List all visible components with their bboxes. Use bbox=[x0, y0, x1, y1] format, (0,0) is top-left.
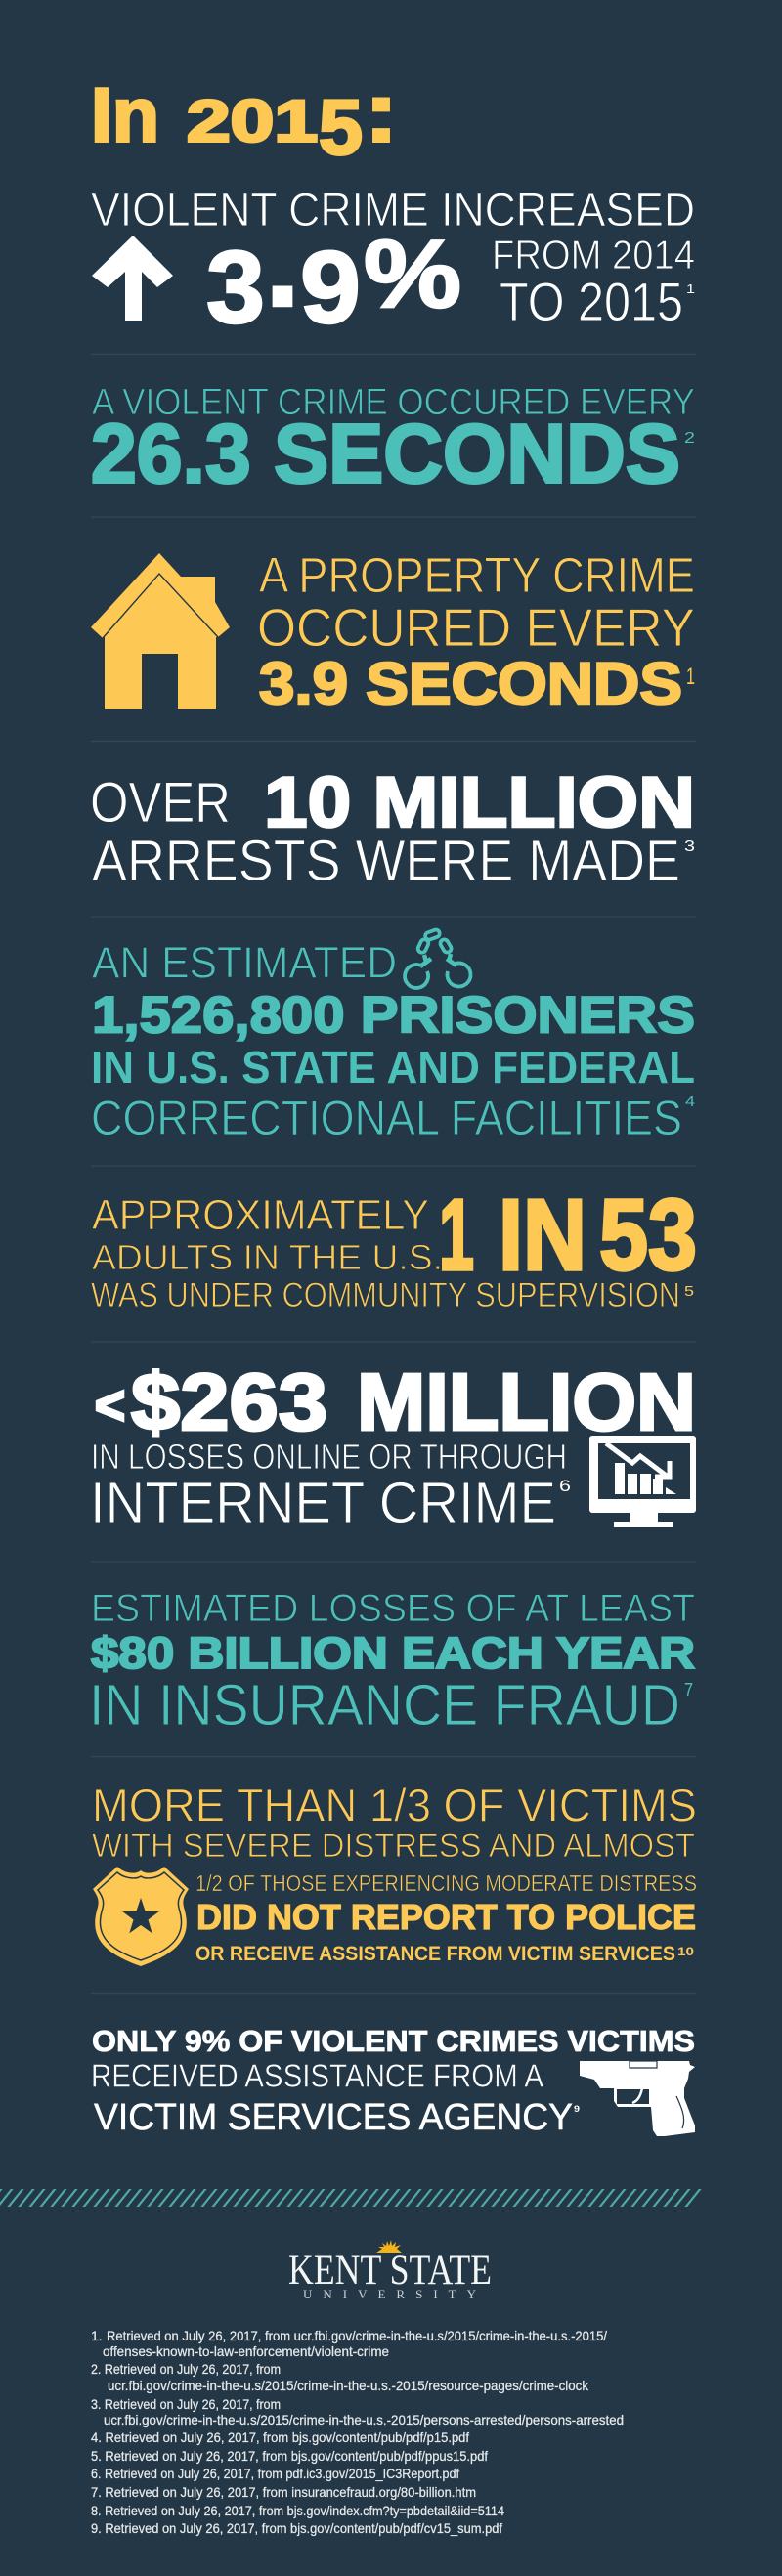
panel: unreported victims: 10 bbox=[677, 1945, 694, 1958]
references: 7. Retrieved on July 26, 2017, from insurancefraud.org/80-billion.htm bbox=[91, 2484, 476, 2500]
references: Retrieved on July 26, 2017, from ucr.fbi.gov/crime-in-the-u.s/2015/crime-in-the-u.s.-2015/ bbox=[107, 2328, 607, 2343]
panel: insurance fraud: $80 BILLION EACH YEAR bbox=[91, 1628, 695, 1678]
panel: internet crime: 6 bbox=[559, 1477, 571, 1495]
panel: insurance fraud: ESTIMATED LOSSES OF AT LEAST bbox=[91, 1587, 695, 1630]
panel: victim services: RECEIVED ASSISTANCE FROM A bbox=[91, 2058, 543, 2093]
panel: internet crime: IN LOSSES ONLINE OR THROUGH bbox=[91, 1437, 567, 1477]
panel: community supervision: IN bbox=[499, 1179, 586, 1291]
title: In bbox=[91, 72, 159, 158]
panel: prisoners: CORRECTIONAL FACILITIES bbox=[91, 1091, 682, 1145]
panel: property crime: 1 bbox=[686, 664, 695, 690]
panel: victim services: 9 bbox=[574, 2104, 580, 2114]
panel: internet crime: $263 bbox=[131, 1356, 327, 1447]
striped band bbox=[0, 2189, 702, 2207]
references: 2. Retrieved on July 26, 2017, from bbox=[91, 2361, 281, 2377]
panel: prisoners: IN U.S. STATE AND FEDERAL bbox=[91, 1042, 695, 1093]
references: 9. Retrieved on July 26, 2017, from bjs.gov/content/pub/pdf/cv15_sum.pdf bbox=[91, 2520, 502, 2536]
panel: community supervision: WAS UNDER COMMUNITY SUPERVISION bbox=[91, 1276, 680, 1314]
panel: prisoners: 4 bbox=[685, 1094, 695, 1110]
panel: arrests bbox=[90, 763, 695, 893]
logo: Kent State University: UNIVERSITY bbox=[303, 2287, 487, 2301]
panel: violent crime increased: FROM 2014 bbox=[492, 232, 695, 278]
panel: violent crime increased: TO 2015 bbox=[500, 271, 683, 332]
panel: internet crime: MILLION bbox=[357, 1356, 696, 1447]
panel: property crime bbox=[91, 547, 695, 716]
panel: prisoners: 1,526,800 PRISONERS bbox=[92, 987, 695, 1044]
stat: 3.9%: . bbox=[265, 191, 300, 333]
stat: 3.9%: 3 bbox=[206, 231, 265, 345]
panel: victim services: VICTIM SERVICES AGENCY bbox=[94, 2097, 573, 2138]
panel: arrests: ARRESTS WERE MADE bbox=[92, 829, 680, 893]
panel: community supervision: ADULTS IN THE U.S. bbox=[92, 1237, 443, 1277]
icon: handgun bbox=[580, 2061, 695, 2136]
panel: violent crime frequency: 26.3 SECONDS bbox=[91, 408, 680, 500]
references: 3. Retrieved on July 26, 2017, from bbox=[91, 2396, 281, 2412]
panel: unreported victims: 1/2 OF THOSE EXPERIENCING MODERATE DISTRESS bbox=[196, 1870, 697, 1896]
panel: unreported victims: DID NOT REPORT TO POLICE bbox=[196, 1897, 696, 1937]
references: 4. Retrieved on July 26, 2017, from bjs.gov/content/pub/pdf/p15.pdf bbox=[91, 2429, 469, 2445]
panel: victim services bbox=[91, 2024, 695, 2138]
panel: arrests: 3 bbox=[684, 838, 695, 855]
references: 8. Retrieved on July 26, 2017, from bjs.gov/index.cfm?ty=pbdetail&iid=5114 bbox=[91, 2503, 504, 2518]
panel: property crime: A PROPERTY CRIME bbox=[259, 547, 695, 603]
icon: police badge bbox=[93, 1867, 189, 1966]
panel: insurance fraud: IN INSURANCE FRAUD bbox=[89, 1673, 680, 1738]
panel: unreported victims: OR RECEIVE ASSISTANCE FROM VICTIM SERVICES bbox=[196, 1943, 675, 1965]
icon: sun bbox=[376, 2240, 402, 2253]
panel: violent crime increased: 1 bbox=[686, 281, 695, 296]
panel: internet crime: < bbox=[95, 1374, 125, 1436]
panel: insurance fraud: 7 bbox=[684, 1680, 693, 1701]
panel: community supervision: 5 bbox=[684, 1283, 694, 1300]
stat: 3.9%: % bbox=[364, 220, 461, 327]
panel: community supervision: APPROXIMATELY bbox=[92, 1191, 429, 1239]
panel: prisoners bbox=[91, 929, 695, 1145]
panel: violent crime increased: VIOLENT CRIME INCREASED bbox=[91, 185, 695, 236]
icon: handcuffs bbox=[405, 929, 470, 988]
panel: unreported victims bbox=[92, 1779, 697, 1966]
stat: 3.9%: 9 bbox=[300, 231, 361, 345]
references: ucr.fbi.gov/crime-in-the-u.s/2015/crime-in-the-u.s.-2015/persons-arrested/persons-arrested bbox=[104, 2412, 624, 2427]
panel: violent crime increased bbox=[91, 185, 695, 345]
title: : bbox=[365, 66, 398, 160]
references: offenses-known-to-law-enforcement/violent-crime bbox=[103, 2343, 389, 2359]
panel: community supervision: 1 bbox=[439, 1179, 474, 1291]
panel: community supervision: 53 bbox=[599, 1179, 697, 1291]
icon: monitor with falling chart bbox=[589, 1436, 696, 1527]
references: ucr.fbi.gov/crime-in-the-u.s/2015/crime-in-the-u.s.-2015/resource-pages/crime-clock bbox=[108, 2378, 589, 2393]
panel: victim services: ONLY 9% OF VIOLENT CRIMES VICTIMS bbox=[92, 2024, 695, 2058]
title: 201 bbox=[187, 88, 318, 154]
panel: property crime: OCCURED EVERY bbox=[257, 597, 695, 658]
panel: prisoners: AN ESTIMATED bbox=[92, 938, 397, 987]
panel: violent crime frequency: 2 bbox=[684, 430, 695, 447]
references: 6. Retrieved on July 26, 2017, from pdf.ic3.gov/2015_IC3Report.pdf bbox=[91, 2466, 459, 2481]
icon: up arrow bbox=[92, 236, 173, 321]
references bbox=[91, 2328, 624, 2536]
panel: community supervision bbox=[91, 1179, 697, 1314]
panel: insurance fraud bbox=[89, 1587, 695, 1738]
panel: internet crime bbox=[90, 1356, 696, 1535]
references: 1. bbox=[91, 2328, 103, 2343]
panel: violent crime frequency: A VIOLENT CRIME OCCURED EVERY bbox=[92, 382, 695, 423]
icon: house bbox=[91, 553, 230, 709]
panel: unreported victims: MORE THAN 1/3 OF VICTIMS bbox=[92, 1779, 697, 1831]
panel: arrests: OVER bbox=[90, 771, 231, 835]
title: 5 bbox=[319, 84, 363, 170]
panel: arrests: 10 MILLION bbox=[264, 763, 695, 842]
references: 5. Retrieved on July 26, 2017, from bjs.gov/content/pub/pdf/ppus15.pdf bbox=[91, 2448, 488, 2464]
logo: Kent State University: KENT STATE bbox=[288, 2248, 492, 2294]
panel: unreported victims: WITH SEVERE DISTRESS AND ALMOST bbox=[92, 1827, 695, 1865]
panel: property crime: 3.9 SECONDS bbox=[259, 651, 682, 716]
logo: Kent State University bbox=[288, 2240, 492, 2301]
panel: internet crime: INTERNET CRIME bbox=[90, 1471, 556, 1535]
